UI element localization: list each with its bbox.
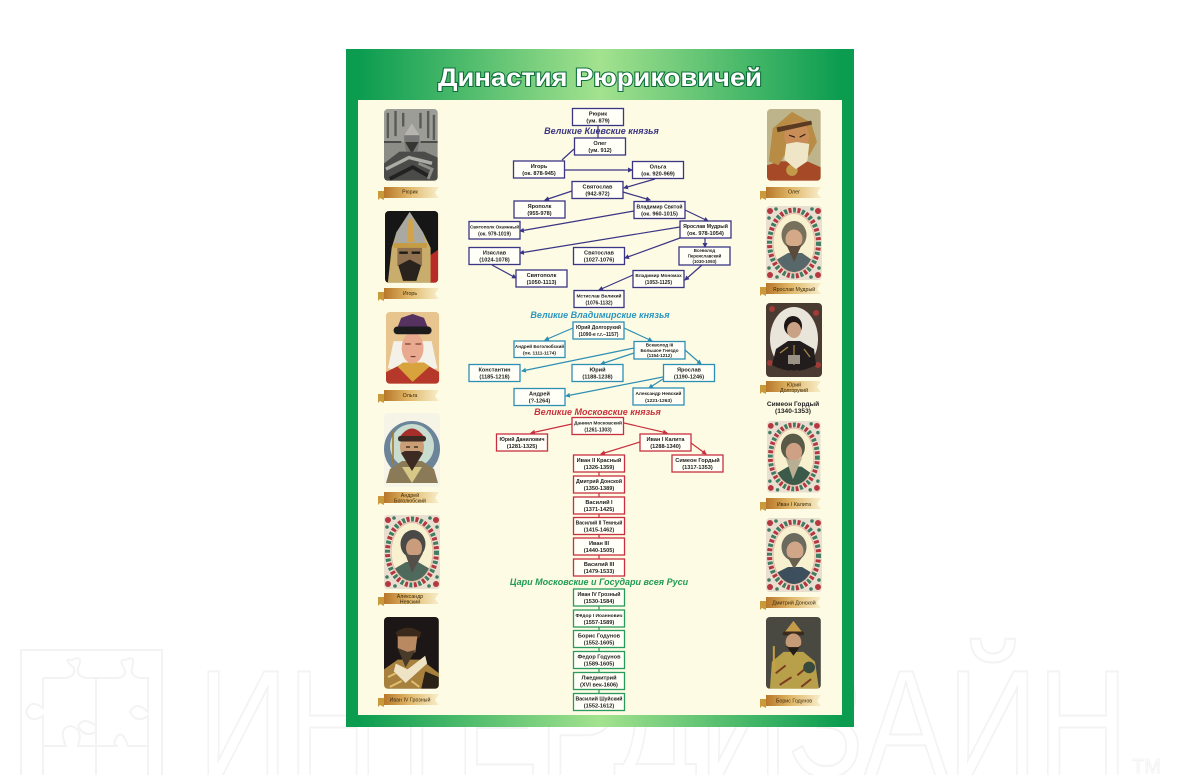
box: Симеон Гордый: [672, 455, 723, 472]
portrait: Иван I Калита: [767, 421, 821, 493]
ribbon: Игорь: [378, 288, 439, 301]
box: Святослав 1027: [574, 248, 624, 264]
box: Василий I: [574, 497, 624, 514]
box: Ярослав Мудрый: Ярослав Мудрый: [683, 223, 728, 230]
box: Юрий: [572, 364, 623, 382]
box: Иван III: [574, 538, 624, 555]
heading: Moscow princes: Великие Московские князья: [534, 407, 662, 417]
header band: [358, 49, 842, 100]
chart: Kiev princes connectors: [492, 125, 708, 290]
cream panel: [358, 100, 842, 715]
box: Андрей: (?-1264): [529, 398, 550, 404]
portrait: Дмитрий Донской: [766, 518, 822, 592]
box: Василий Шуйский: [574, 694, 624, 710]
box: Константин: Константин: [478, 368, 511, 374]
ribbon: Ярослав Мудрый: [760, 283, 821, 296]
box: Борис Годунов: [574, 630, 624, 648]
box: Рюрик: [572, 108, 624, 126]
ribbon: Андрей Боголюбский: [378, 492, 439, 505]
ribbon: Борис Годунов: [760, 695, 821, 708]
box: Святополк Окаянный: Святополк Окаянный: [470, 224, 519, 230]
box: Василий III: Василий III: [584, 561, 615, 568]
box: Ярослав: Ярослав: [677, 368, 702, 374]
box: Фёдор I Иоаннович: [574, 610, 624, 627]
box: Олег: (ум. 912): [588, 148, 612, 154]
box: Юрий Данилович: Юрий Данилович: [499, 436, 545, 443]
box: Святополк 1050: [516, 270, 567, 287]
ribbon: Борис Годунов: Борис Годунов: [776, 698, 812, 704]
box: Святополк Окаянный: [469, 222, 520, 239]
box: Юрий: Юрий: [589, 366, 606, 374]
watermark: puzzle logo: [21, 650, 162, 775]
box: Юрий Долгорукий: [573, 322, 624, 339]
box: Мстислав Великий: [574, 290, 624, 308]
box: Святослав 1027: (1027-1076): [584, 258, 614, 264]
box: Василий Шуйский: (1552-1612): [584, 704, 614, 710]
portrait: Игорь: [385, 211, 438, 283]
box: Владимир Святой: [634, 202, 685, 218]
box: Святослав: [572, 182, 623, 198]
box: Мстислав Великий: (1076-1132): [586, 300, 613, 306]
box: Василий III: [574, 559, 624, 576]
box: Симеон Гордый: (1317-1353): [682, 465, 713, 471]
green frame: [346, 49, 854, 727]
box: Дмитрий Донской: Дмитрий Донской: [576, 478, 622, 485]
box: Александр Невский: (1221-1263): [645, 398, 672, 404]
ribbon: Юрий Долгорукий: [760, 381, 821, 394]
box: Олег: [574, 138, 626, 155]
caption: Симеон Гордый: [767, 400, 819, 415]
caption: Симеон Гордый: Симеон Гордый: [767, 400, 819, 408]
ribbon: Дмитрий Донской: Дмитрий Донской: [772, 600, 816, 606]
box: Борис Годунов: Борис Годунов: [578, 634, 621, 640]
box: Игорь: (ок. 878-945): [522, 171, 556, 177]
box: Изяслав: Изяслав: [483, 250, 507, 256]
ribbon: Ярослав Мудрый: Ярослав Мудрый: [773, 286, 815, 293]
ribbon: Рюрик: [378, 187, 439, 200]
box: Даниил Московский: Даниил Московский: [574, 420, 622, 426]
box: Владимир Святой: (ок. 960-1015): [641, 212, 678, 218]
ribbon: Андрей Боголюбский: Боголюбский: [394, 498, 426, 504]
box: Всеволод III: Большое Гнездо: [640, 348, 679, 353]
box: Даниил Московский: [572, 418, 624, 434]
chart: Moscow princes connectors: [531, 423, 706, 559]
portrait: Иван IV Грозный: [384, 617, 439, 689]
box: Василий Шуйский: Василий Шуйский: [576, 696, 622, 702]
box: Ольга: (ок. 920-969): [641, 172, 675, 178]
box: Лжедмитрий: (XVI век-1606): [580, 682, 618, 688]
box: Юрий Долгорукий: Юрий Долгорукий: [576, 324, 621, 331]
box: Иван IV Грозный: [574, 589, 624, 606]
ribbon: Дмитрий Донской: [760, 597, 821, 610]
box: Фёдор I Иоаннович: Фёдор I Иоаннович: [575, 613, 623, 619]
box: Федор Годунов: Федор Годунов: [577, 654, 621, 660]
box: Изяслав: [469, 248, 520, 264]
ribbon: Ольга: [378, 390, 439, 403]
chart: tsars connectors: [598, 606, 600, 693]
box: Василий II Темный: [574, 518, 624, 534]
ribbon: Иван I Калита: [760, 498, 821, 511]
portrait: Ярослав Мудрый: [766, 206, 822, 280]
box: Василий III: (1479-1533): [584, 569, 614, 575]
box: Ярополк: (955-978): [527, 211, 552, 217]
box: Изяслав: (1024-1078): [479, 258, 510, 264]
ribbon: Андрей Боголюбский: Андрей: [401, 492, 419, 499]
ribbon: Рюрик: Рюрик: [402, 190, 419, 196]
box: Даниил Московский: (1261-1303): [584, 428, 612, 434]
box: Рюрик: Рюрик: [589, 112, 607, 118]
box: Всеволод III: Всеволод III: [646, 342, 673, 348]
ribbon: Игорь: Игорь: [403, 291, 417, 297]
box: Дмитрий Донской: (1350-1389): [584, 486, 614, 492]
box: Юрий Данилович: (1281-1325): [507, 444, 537, 450]
portrait: Рюрик: [384, 109, 438, 181]
box: Мстислав Великий: Мстислав Великий: [576, 292, 622, 300]
heading: tsars: Цари Московские и Государи всея Руси: [510, 577, 689, 587]
box: Юрий Данилович: [496, 434, 548, 451]
box: Федор Годунов: (1589-1605): [584, 662, 614, 668]
title: Династия Рюриковичей: [438, 64, 762, 92]
ribbon: Александр Невский: Александр: [397, 594, 423, 600]
ribbon: Иван IV Грозный: [378, 694, 439, 707]
heading: Vladimir princes: Великие Владимирские князья: [530, 310, 670, 320]
box: Ярополк: [514, 201, 565, 218]
box: Лжедмитрий: [574, 672, 624, 690]
box: Юрий: (1188-1238): [582, 374, 613, 380]
box: Лжедмитрий: Лжедмитрий: [581, 674, 617, 682]
box: Иван IV Грозный: (1530-1584): [584, 599, 614, 605]
box: Василий II Темный: Василий II Темный: [576, 520, 622, 526]
box: Иван I Калита: Иван I Калита: [647, 437, 685, 443]
box: Федор Годунов: [574, 652, 624, 668]
box: Борис Годунов: (1552-1605): [584, 640, 614, 646]
box: Дмитрий Донской: [574, 476, 624, 493]
portrait: Александр Невский: [384, 515, 440, 589]
box: Юрий Долгорукий: (1090-е г.г.–1157): [579, 332, 619, 338]
box: Владимир Мономах: (1053-1125): [645, 280, 672, 286]
box: Святослав: (942-972): [585, 192, 610, 198]
box: Иван IV Грозный: Иван IV Грозный: [578, 591, 620, 598]
box: Всеволод Переяславский: Всеволод: [694, 248, 715, 253]
ribbon: Иван IV Грозный: Иван IV Грозный: [390, 696, 430, 704]
box: Владимир Мономах: Владимир Мономах: [635, 273, 682, 278]
box: Святополк 1050: (1050-1113): [527, 280, 557, 286]
box: Александр Невский: Александр Невский: [636, 390, 682, 396]
poster background: [346, 49, 854, 727]
heading: Kiev princes: Великие Киевские князья: [544, 126, 660, 136]
box: Игорь: [514, 161, 564, 178]
caption: Симеон Гордый: (1340-1353): [775, 408, 811, 415]
bottom band: [358, 715, 842, 727]
portrait: Олег: [767, 109, 821, 181]
box: Святополк 1050: Святополк: [527, 273, 557, 279]
ribbon: Ольга: Ольга: [403, 393, 417, 399]
box: Всеволод III: (1154-1212): [647, 353, 672, 358]
ribbon: Олег: Олег: [788, 190, 800, 196]
box: Василий I: Василий I: [585, 499, 613, 506]
box: Фёдор I Иоаннович: (1557-1589): [584, 620, 614, 626]
box: Рюрик: (ум. 879): [586, 118, 610, 124]
box: Ярослав Мудрый: (ок. 978-1054): [687, 231, 724, 237]
box: Ольга: [632, 162, 684, 178]
box: Андрей: Андрей: [529, 390, 551, 398]
box: Симеон Гордый: Симеон Гордый: [675, 457, 720, 464]
box: Всеволод Переяславский: [679, 247, 730, 265]
box: Ольга: Ольга: [650, 164, 667, 170]
box: Константин: [469, 364, 520, 382]
box: Василий I: (1371-1425): [584, 507, 614, 513]
box: Иван I Калита: (1288-1340): [650, 444, 681, 450]
box: Святослав 1027: Святослав: [584, 250, 614, 256]
box: Олег: Олег: [593, 141, 607, 147]
ribbon: Юрий Долгорукий: Долгорукий: [780, 387, 808, 394]
box: Василий II Темный: (1415-1462): [584, 528, 614, 534]
box: Ярослав: [664, 364, 714, 382]
box: Иван II Красный: (1326-1359): [584, 465, 614, 471]
box: Александр Невский: [633, 388, 684, 405]
box: Иван II Красный: [574, 455, 624, 472]
box: Святополк Окаянный: (ок. 979-1019): [478, 232, 511, 238]
box: Иван I Калита: [640, 434, 691, 451]
box: Игорь: Игорь: [531, 164, 548, 170]
box: Андрей Боголюбский: (ок. 1111-1174): [523, 350, 556, 356]
box: Иван III: (1440-1505): [584, 548, 614, 554]
ribbon: Олег: [760, 187, 821, 200]
box: Всеволод Переяславский: (1030-1093): [693, 259, 717, 264]
box: Ярослав: (1190-1246): [674, 374, 704, 380]
box: Всеволод III: [634, 342, 685, 359]
box: Иван II Красный: Иван II Красный: [577, 457, 622, 464]
box: Владимир Мономах: [633, 270, 684, 288]
box: Владимир Святой: Владимир Святой: [637, 204, 682, 210]
ribbon: Александр Невский: [378, 593, 439, 606]
box: Андрей: [514, 388, 565, 406]
portrait: Юрий Долгорукий: [766, 303, 822, 377]
box: Святослав: Святослав: [583, 184, 613, 190]
ribbon: Иван I Калита: Иван I Калита: [777, 502, 811, 508]
box: Андрей Боголюбский: Андрей Боголюбский: [515, 343, 564, 349]
ribbon: Александр Невский: Невский: [400, 598, 420, 606]
portrait: Ольга: [386, 312, 439, 384]
box: Ярополк: Ярополк: [528, 204, 552, 210]
box: Андрей Боголюбский: [514, 341, 565, 358]
portrait: Андрей Боголюбский: [384, 421, 440, 483]
box: Ярослав Мудрый: [680, 221, 731, 238]
box: Иван III: Иван III: [589, 541, 609, 547]
box: Константин: (1185-1218): [479, 374, 510, 380]
box: Всеволод Переяславский: Переяславский: [688, 254, 722, 258]
chart: Vladimir princes connectors: [522, 328, 701, 396]
portrait: Борис Годунов: [766, 617, 821, 689]
ribbon: Юрий Долгорукий: Юрий: [787, 382, 801, 388]
